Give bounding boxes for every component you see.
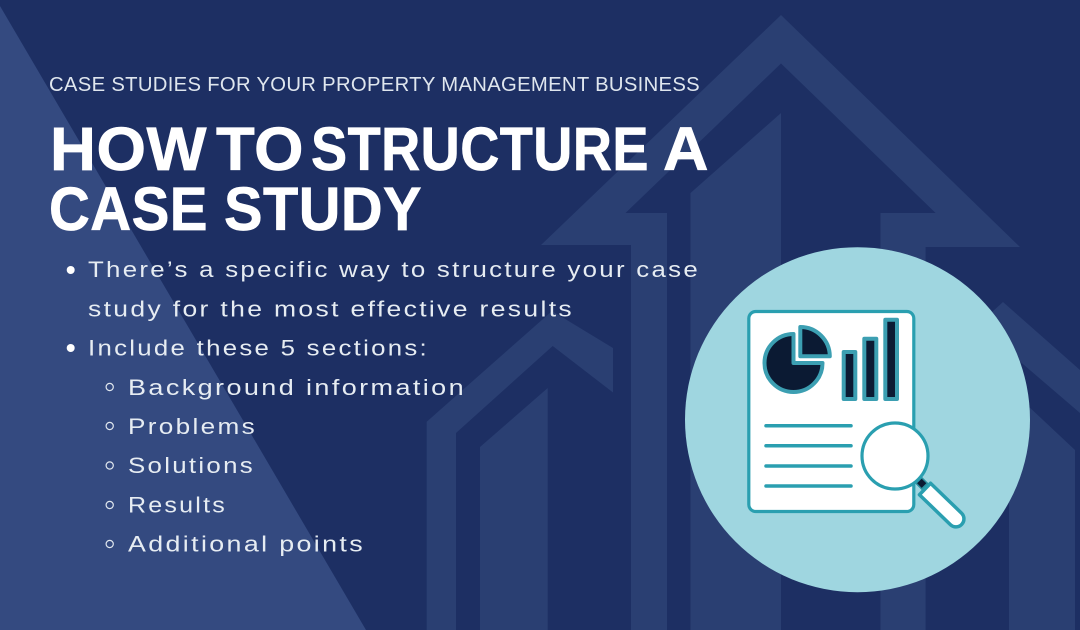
- sub-bullets: five sections: Results: [128, 492, 227, 518]
- background: small left house arrow: [427, 311, 613, 630]
- title: A: [663, 115, 709, 183]
- title: TO: [216, 115, 304, 183]
- icon: report with magnifier on circle: [685, 247, 1030, 592]
- background: large house arrow: [541, 15, 1020, 630]
- bullet: specific way to structure: study for the most effective results: [88, 296, 574, 322]
- icon background circle: [685, 247, 1030, 592]
- text lines: [766, 426, 851, 486]
- sub-bullets: five sections: [106, 375, 466, 557]
- background: right house arrow: [950, 302, 1080, 630]
- title: STUDY: [224, 175, 422, 243]
- bullet: specific way to structure: There’s a specific way to structure your case: [88, 257, 700, 282]
- bar chart: [844, 320, 897, 399]
- sub-bullets: five sections: Solutions: [128, 453, 255, 478]
- magnifier: [862, 423, 967, 530]
- background: left diagonal triangle: [0, 6, 366, 630]
- pie chart: [764, 327, 830, 392]
- sub-bullets: five sections: Additional points: [128, 532, 365, 557]
- bullet: include these sections: Include these 5 sections:: [88, 336, 429, 361]
- sub-bullets: five sections: Background information: [128, 375, 466, 400]
- sub-bullets: five sections: Problems: [128, 414, 257, 439]
- title: STRUCTURE: [311, 115, 649, 183]
- title: [49, 115, 709, 243]
- title: CASE: [49, 175, 208, 243]
- document page: [749, 312, 914, 512]
- title: HOW: [50, 115, 207, 183]
- bullet list: [67, 257, 700, 557]
- bullet: specific way to structure: [67, 257, 700, 322]
- subtitle: CASE STUDIES FOR YOUR PROPERTY MANAGEMENT BUSINESS: [49, 74, 700, 96]
